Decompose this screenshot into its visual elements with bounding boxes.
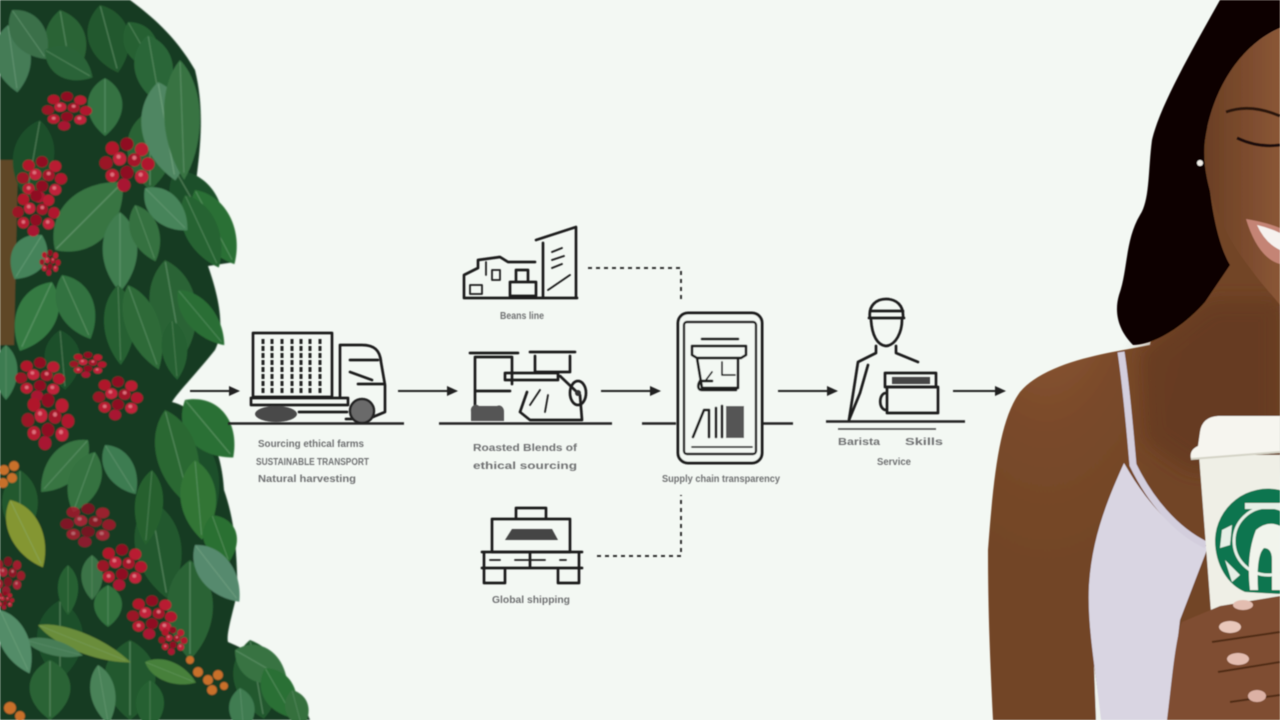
arrow: roastery to app (601, 386, 661, 396)
red berry clusters (0, 92, 187, 655)
barista label: Barista (838, 437, 881, 448)
smiling woman holding a coffee cup (988, 0, 1280, 720)
truck label: SUSTAINABLE TRANSPORT (256, 457, 369, 468)
truck label: Sourcing ethical farms (258, 439, 364, 450)
dashed connector: bottom (597, 495, 681, 556)
tank top strap (1121, 352, 1206, 545)
roastery label: ethical sourcing (473, 461, 577, 472)
icon: warehouse and storefront (464, 227, 577, 298)
green siren logo (1215, 489, 1280, 594)
hand holding cup (1167, 596, 1280, 720)
coffee plant with red berries (0, 0, 313, 720)
white tank top (1089, 463, 1208, 720)
storefront label: Beans line (500, 311, 544, 322)
roastery label (473, 443, 578, 472)
arm and chest (988, 130, 1280, 720)
hair (1117, 0, 1280, 345)
packing label: Global shipping (492, 595, 570, 606)
arrow: truck to roastery (398, 386, 458, 396)
closed eye (1237, 138, 1280, 146)
icon: packing workstation (482, 508, 582, 583)
icon: barista at counter (826, 299, 965, 429)
truck label: Natural harvesting (258, 474, 356, 485)
roastery label: Roasted Blends of (473, 443, 578, 454)
orange ripening berries (0, 461, 228, 720)
leaves lower (0, 386, 313, 720)
truck label (256, 439, 369, 485)
earring (1197, 160, 1203, 166)
trunk (0, 160, 18, 345)
arrow: app to barista (778, 386, 838, 396)
arrow: barista to customer (953, 386, 1006, 396)
leaves upper (0, 0, 251, 400)
icon: delivery truck (228, 333, 404, 424)
icon: mobile phone app (642, 313, 793, 463)
plant silhouette (0, 0, 310, 720)
chest shading (1140, 300, 1280, 470)
background gap beside arm (1094, 665, 1102, 720)
eyebrow (1226, 108, 1280, 116)
dashed connector: top (588, 268, 681, 303)
barista label: Service (877, 457, 911, 468)
barista label (838, 437, 944, 468)
coffee cup (1191, 416, 1280, 625)
background foliage (2, 0, 286, 720)
arrow: into truck (190, 386, 240, 396)
smile (1246, 219, 1280, 264)
barista label: Skills (905, 437, 944, 448)
phone label: Supply chain transparency (662, 474, 780, 485)
face (1204, 28, 1280, 305)
process flow diagram (190, 227, 1006, 606)
icon: roasting equipment (439, 352, 612, 424)
